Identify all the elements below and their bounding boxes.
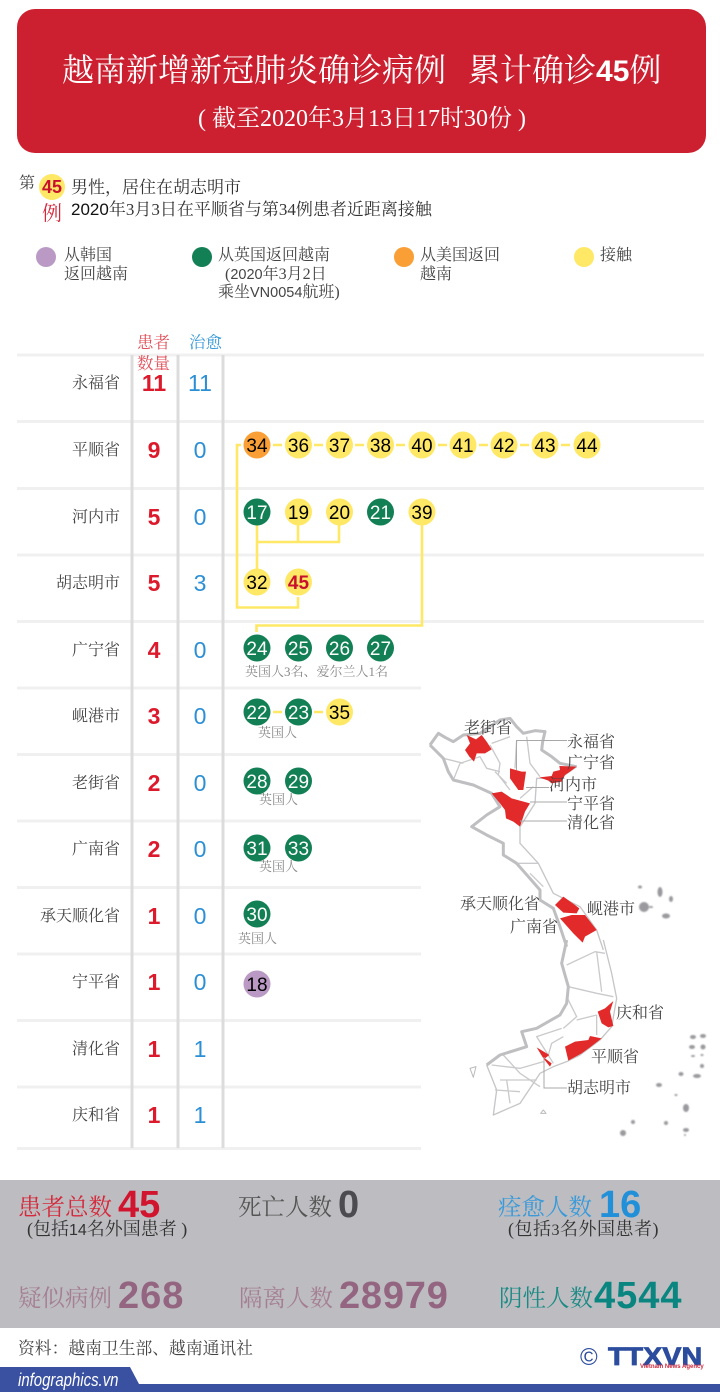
row: Ninh Binh: 宁平省 [72, 974, 120, 991]
subtitle date: ( 截至2020年3月13日17时30份 ) [198, 106, 526, 132]
legend: from Korea [36, 246, 128, 282]
row: Ho Chi Minh City [56, 570, 206, 596]
row: Thua Thien Hue [40, 903, 206, 929]
map labels: 广宁省 [567, 754, 615, 772]
legend: from UK: 乘坐VN0054航班) [218, 284, 340, 301]
featured case 45 [19, 174, 432, 225]
land outline south [470, 940, 617, 1115]
stat: deaths: 死亡人数 [238, 1195, 332, 1221]
label: case ordinal: 第 [19, 175, 35, 192]
row: Ho Chi Minh City: 5 [148, 570, 160, 596]
map labels: 清化省 [567, 814, 615, 832]
stat: negative: 4544 [594, 1275, 683, 1317]
stat: total patients: (包括14名外国患者 ) [27, 1219, 187, 1239]
row: Ho Chi Minh City: 胡志明市 [56, 575, 120, 592]
row: Quang Ninh [72, 637, 206, 663]
stat: quarantined: 隔离人数 [239, 1286, 333, 1312]
stat: recovered [498, 1184, 659, 1239]
bubble: Hue case [244, 900, 270, 928]
case description [71, 178, 432, 219]
row: Hanoi: 河内市 [72, 509, 120, 526]
bubbles: Ho Chi Minh City cases [244, 568, 312, 596]
stat: quarantined: 28979 [339, 1275, 449, 1317]
leader lines [516, 740, 567, 1088]
bubbles: Hanoi cases [244, 498, 436, 526]
stat: total patients: 45 [118, 1184, 160, 1226]
footer site name: infographics.vn [18, 1370, 118, 1390]
row: Thanh Hoa [72, 1036, 206, 1062]
legend: from USA: 从美国返回 [420, 247, 500, 264]
bubbles: Ho Chi Minh City cases: 32 [246, 573, 268, 594]
bubbles: Quang Ninh cases: 26 [329, 639, 350, 660]
note: Lao Cai nationality: 英国人 [259, 792, 298, 807]
row: Da Nang: 3 [148, 703, 160, 729]
legend: from UK: 从英国返回越南 [218, 247, 330, 264]
legend: from Korea: 返回越南 [64, 266, 128, 282]
bubbles: Binh Thuan cases: 34 [246, 436, 268, 457]
map labels [460, 719, 664, 1097]
row: Thanh Hoa: 清化省 [72, 1041, 120, 1058]
row: Hanoi [72, 504, 206, 530]
row: Khanh Hoa: 庆和省 [72, 1107, 120, 1124]
row: Quang Ninh: 4 [148, 637, 160, 663]
bubbles: Ho Chi Minh City cases: 45 [288, 573, 309, 594]
bubbles: Binh Thuan cases: 38 [370, 436, 391, 457]
connector lines [237, 445, 570, 712]
legend: from Korea: 从韩国 [64, 247, 112, 264]
bubbles: Da Nang cases: 22 [246, 703, 268, 724]
row: Da Nang: 岘港市 [72, 708, 120, 725]
bubbles: Lao Cai cases [244, 768, 312, 794]
row: Thua Thien Hue: 1 [148, 903, 160, 929]
row: Thua Thien Hue: 0 [194, 903, 206, 929]
bubbles: Quang Nam cases: 33 [288, 839, 309, 860]
map labels: 宁平省 [567, 795, 615, 813]
bubbles: Quang Ninh cases [244, 634, 394, 662]
bubble: Ninh Binh case [244, 970, 270, 998]
bubbles: Binh Thuan cases: 44 [576, 436, 598, 457]
bubbles: Binh Thuan cases: 40 [411, 436, 433, 457]
islands [620, 886, 706, 1136]
bubbles: Binh Thuan cases: 41 [452, 436, 474, 457]
stat: negative [499, 1275, 683, 1317]
bubble: Hue case: 30 [246, 905, 268, 926]
row: Ninh Binh [72, 969, 206, 995]
row: Ninh Binh: 0 [194, 969, 206, 995]
row: Thua Thien Hue: 承天顺化省 [40, 908, 120, 925]
bubbles: Binh Thuan cases: 42 [493, 436, 515, 457]
map labels: 岘港市 [587, 900, 635, 918]
legend: from USA: 越南 [420, 266, 452, 282]
row: Binh Thuan: 9 [148, 437, 160, 463]
row: Vinh Phuc: 11 [188, 370, 212, 396]
source: 资料：越南卫生部、越南通讯社 [18, 1339, 253, 1358]
map labels: 庆和省 [616, 1004, 664, 1022]
row: Khanh Hoa: 1 [148, 1102, 160, 1128]
map labels: 承天顺化省 [460, 895, 540, 913]
row: Quang Nam [72, 836, 206, 862]
bubbles: Da Nang cases: 23 [288, 703, 309, 724]
stat: total patients: 患者总数 [18, 1195, 112, 1221]
bubbles: Hanoi cases: 21 [370, 503, 391, 524]
row: Quang Nam: 0 [194, 836, 206, 862]
stat: recovered: 16 [599, 1184, 641, 1226]
stat: negative: 阴性人数 [499, 1286, 593, 1312]
row: Quang Nam: 广南省 [72, 841, 120, 858]
note: Quang Nam nationality: 英国人 [259, 859, 298, 874]
row: Ninh Binh: 1 [148, 969, 160, 995]
map labels: 河内市 [549, 776, 597, 794]
row: Hanoi: 5 [148, 504, 160, 530]
legend: from UK: (2020年3月2日 [225, 266, 327, 282]
legend: from UK [192, 246, 340, 301]
bubbles: Hanoi cases: 20 [329, 503, 350, 524]
stat: deaths: 0 [338, 1184, 359, 1226]
legend: contact [574, 246, 632, 267]
highlighted provinces north and centre [465, 735, 597, 943]
column heading: patient count [137, 333, 170, 373]
map labels: 广南省 [510, 918, 558, 936]
bubbles: Quang Ninh cases: 24 [246, 639, 268, 660]
copyright symbol: © [580, 1344, 598, 1371]
title: 越南新增新冠肺炎确诊病例 累计确诊45例 [62, 52, 661, 88]
bubble: Ninh Binh case: 18 [246, 975, 268, 996]
stat: total patients [18, 1184, 187, 1239]
bubbles: Binh Thuan cases: 36 [288, 436, 309, 457]
bubbles: Quang Ninh cases: 27 [370, 639, 391, 660]
row: Lao Cai: 0 [194, 770, 206, 796]
bubbles: Binh Thuan cases [244, 432, 600, 458]
note: Hue nationality: 英国人 [238, 931, 277, 946]
bubbles: Da Nang cases [244, 698, 353, 726]
agency name: TTXVN [608, 1343, 702, 1371]
statistics panel [0, 1180, 720, 1328]
map labels: 永福省 [567, 733, 615, 751]
bubbles: Lao Cai cases: 29 [288, 772, 309, 793]
stat: suspected [18, 1275, 184, 1317]
legend: from USA [394, 246, 500, 282]
column heading: recovered: 治愈 [189, 333, 222, 352]
bubbles: Hanoi cases: 19 [288, 503, 309, 524]
stat: recovered: (包括3名外国患者) [508, 1219, 659, 1239]
row: Quang Nam: 2 [148, 836, 160, 862]
row: Khanh Hoa [72, 1102, 206, 1128]
row: Khanh Hoa: 1 [194, 1102, 206, 1128]
legend: contact: 接触 [600, 247, 632, 264]
bubbles: Hanoi cases: 39 [411, 503, 433, 524]
column heading: patient count: 患者 [137, 333, 170, 352]
row: Binh Thuan [72, 437, 206, 463]
stat: quarantined [239, 1275, 449, 1317]
badge: case 45: 45 [42, 177, 62, 197]
row: Vinh Phuc [72, 370, 212, 396]
row: Thanh Hoa: 1 [194, 1036, 206, 1062]
row: Da Nang: 0 [194, 703, 206, 729]
land outline north and centre [430, 718, 603, 950]
bubbles: Binh Thuan cases: 37 [329, 436, 350, 457]
note: Quang Ninh nationalities: 英国人3名、爱尔兰人1名 [245, 664, 388, 679]
highlighted provinces south [537, 1001, 613, 1067]
map labels: 胡志明市 [567, 1079, 631, 1097]
footer band [0, 1367, 720, 1392]
stat: suspected: 268 [118, 1275, 184, 1317]
badge: case 45 [39, 174, 65, 200]
bubbles: Lao Cai cases: 28 [246, 772, 268, 793]
stat: suspected: 疑似病例 [18, 1286, 112, 1312]
map labels: 老街省 [464, 719, 512, 737]
row: Lao Cai [72, 770, 206, 796]
row: Lao Cai: 老街省 [72, 775, 120, 792]
row: Quang Ninh: 0 [194, 637, 206, 663]
case description: 2020年3月3日在平顺省与第34例患者近距离接触 [71, 200, 432, 219]
note: Da Nang nationality: 英国人 [258, 725, 297, 740]
row: Binh Thuan: 0 [194, 437, 206, 463]
bubbles: Quang Nam cases [244, 834, 312, 862]
map labels: 平顺省 [591, 1048, 639, 1066]
column heading: patient count: 数量 [137, 354, 170, 373]
row: Vinh Phuc: 11 [142, 370, 166, 396]
bubbles: Da Nang cases: 35 [329, 703, 350, 724]
row: Hanoi: 0 [194, 504, 206, 530]
bubbles: Hanoi cases: 17 [246, 503, 268, 524]
stat: deaths [238, 1184, 359, 1226]
row: Vinh Phuc: 永福省 [72, 375, 120, 392]
label: case suffix: 例 [42, 203, 62, 225]
stat: recovered: 痊愈人数 [498, 1195, 592, 1221]
row: Lao Cai: 2 [148, 770, 160, 796]
case description: 男性，居住在胡志明市 [71, 178, 241, 197]
title banner [17, 9, 706, 153]
agency tagline: Vietnam News Agency [640, 1364, 704, 1370]
row: Thanh Hoa: 1 [148, 1036, 160, 1062]
row: Da Nang [72, 703, 206, 729]
bubbles: Quang Nam cases: 31 [246, 839, 268, 860]
map of Vietnam [428, 716, 707, 1137]
row: Ho Chi Minh City: 3 [194, 570, 206, 596]
legend [36, 246, 632, 301]
bubbles: Binh Thuan cases: 43 [534, 436, 556, 457]
row: Binh Thuan: 平顺省 [72, 442, 120, 459]
row: Quang Ninh: 广宁省 [72, 642, 120, 659]
logo: TTXVN [580, 1343, 704, 1371]
bubbles: Quang Ninh cases: 25 [288, 639, 309, 660]
